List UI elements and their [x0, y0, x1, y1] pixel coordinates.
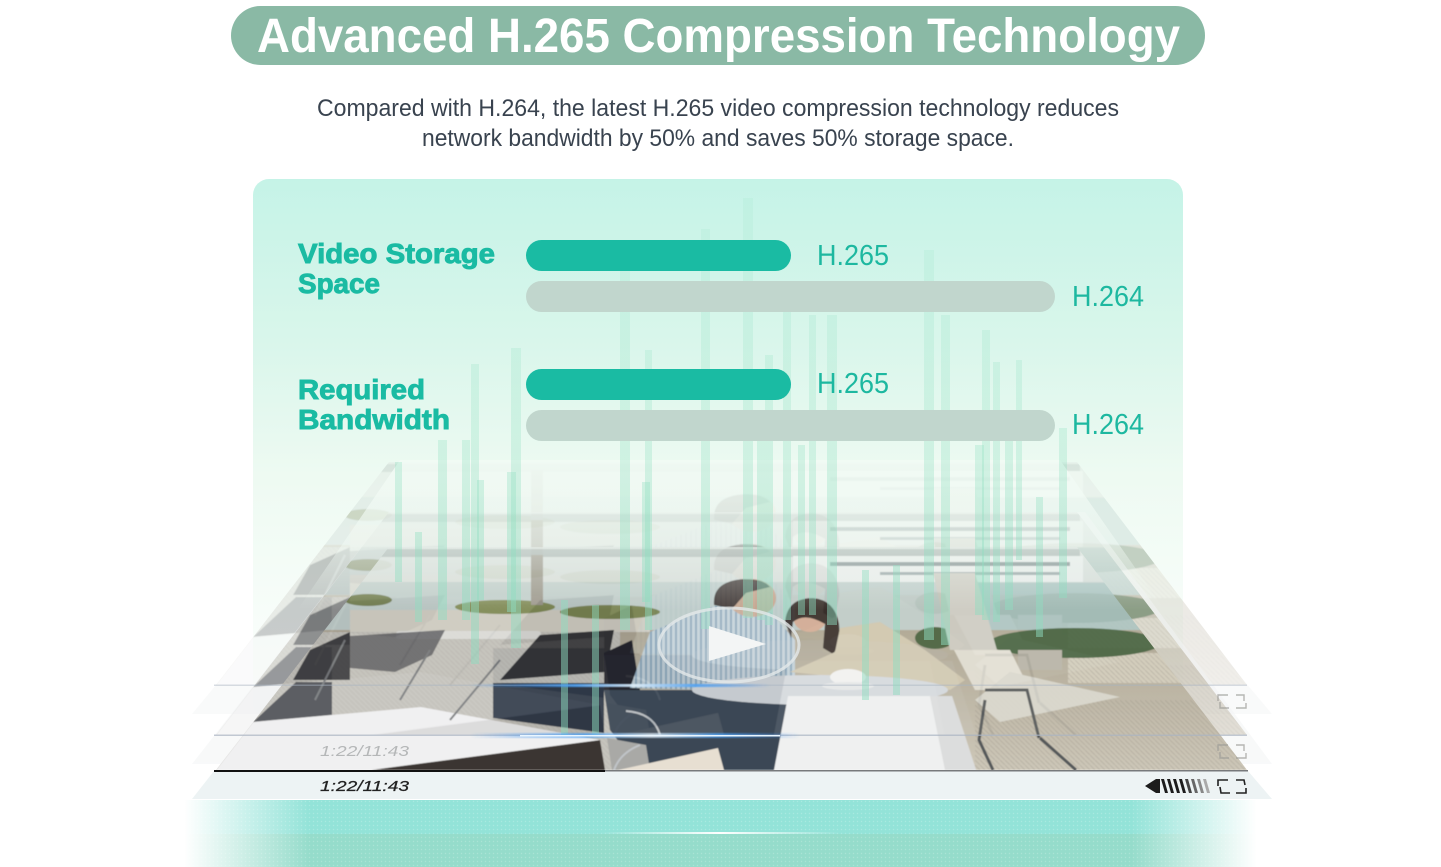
icon: volume [1145, 779, 1210, 793]
play button [659, 608, 799, 682]
line lower [214, 734, 1247, 736]
label: required bandwidth: Required [298, 374, 425, 405]
label: video storage space: Space [298, 268, 380, 299]
play triangle [709, 626, 766, 661]
front video frame photo [200, 547, 1260, 770]
progress line remaining [605, 770, 1248, 772]
ghost of upper layer over the photo [200, 512, 1260, 735]
ghost fullscreen icons [1218, 695, 1246, 758]
panel: gradient chart background [253, 179, 1183, 719]
blue light streak lower [470, 733, 800, 738]
band dot texture [150, 800, 1291, 867]
timestamp: 1:22/11:43 [320, 778, 410, 795]
ghost layer [200, 512, 1260, 735]
label: video storage space: Video Storage [298, 238, 495, 269]
ghost timestamp on middle layer: 1:22/11:43 [320, 743, 410, 760]
control bar strip [192, 771, 1272, 799]
icon: fullscreen [1218, 780, 1246, 793]
chart group: required bandwidth [298, 368, 1144, 441]
lower streak halo [470, 733, 800, 738]
background green data columns [395, 198, 1067, 735]
intro line 2: network bandwidth by 50% and saves 50% storage space. [422, 125, 1014, 152]
bar: H.265 bandwidth [526, 369, 791, 400]
progress line played [214, 770, 605, 772]
bar label H.265: H.265 [817, 368, 889, 400]
translucent back video layer [192, 462, 1272, 714]
bottom teal light band [150, 800, 1291, 867]
title pill [231, 6, 1205, 65]
line upper [214, 684, 1247, 686]
bar: H.265 storage [526, 240, 791, 271]
band lower strip [150, 834, 1291, 867]
bar label H.265: H.265 [817, 240, 889, 272]
back layer frame [192, 462, 1272, 714]
infographic canvas [192, 6, 1272, 867]
bar label H.264: H.264 [1072, 409, 1144, 441]
band upper strip [150, 800, 1291, 834]
label: required bandwidth: Bandwidth [298, 404, 450, 435]
bar: H.264 storage [526, 281, 1055, 312]
play ring [659, 608, 799, 682]
video control bar [192, 770, 1272, 799]
ghost control lines of upper layers [214, 684, 1247, 758]
title text: Advanced H.265 Compression Technology [257, 10, 1180, 63]
haze over top of the photo layers [312, 462, 1142, 604]
blue light streak upper [470, 684, 770, 687]
bar: H.264 bandwidth [526, 410, 1055, 441]
intro text [317, 95, 1119, 152]
band edge fade [150, 800, 1291, 867]
intro line 1: Compared with H.264, the latest H.265 video compression technology reduces [317, 95, 1119, 122]
bar label H.264: H.264 [1072, 281, 1144, 313]
chart group: video storage space [298, 238, 1144, 313]
translucent middle video layer [192, 512, 1272, 764]
middle layer frame [192, 512, 1272, 764]
band glow line [600, 832, 840, 834]
pill background [231, 6, 1205, 65]
